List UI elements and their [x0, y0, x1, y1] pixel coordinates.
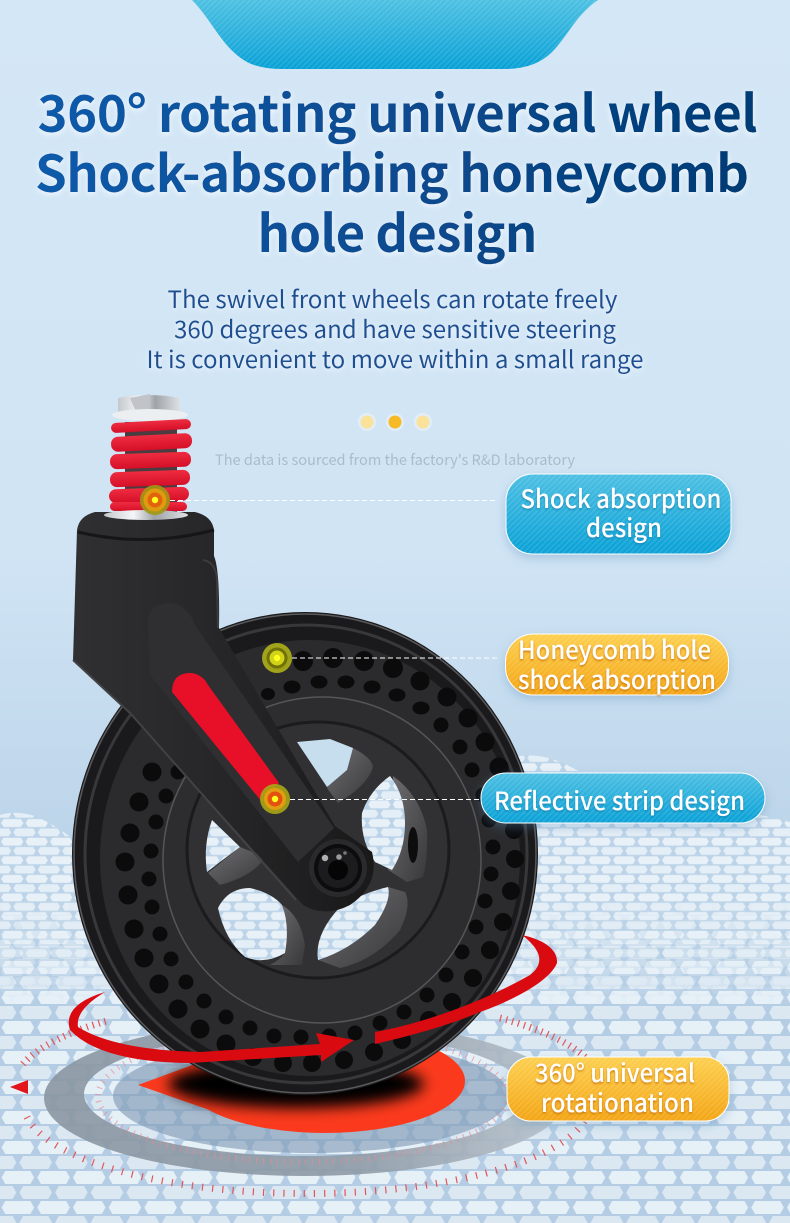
- leader lines: [170, 500, 498, 800]
- wheel: [72, 512, 538, 1095]
- callout: 360 universal rotationation: 360° universal: [535, 1054, 695, 1090]
- callout: shock absorption design: [506, 474, 731, 554]
- target marker: spring: [140, 485, 170, 515]
- callout: 360 universal rotationation: [507, 1054, 729, 1121]
- red coils: [109, 419, 192, 511]
- orange floor disc: [138, 1029, 465, 1133]
- spring and bolt: [104, 394, 192, 520]
- callout: 360 universal rotationation: rotationation: [541, 1084, 694, 1120]
- title: [35, 73, 758, 267]
- spoke walls: [208, 748, 427, 968]
- reflective strip: [172, 673, 279, 802]
- description text: [146, 280, 644, 375]
- red rotation arrow: [69, 935, 557, 1063]
- target marker: reflector: [260, 784, 290, 814]
- callout: honeycomb hole shock absorption: [506, 631, 728, 697]
- description text: It is convenient to move within a small range: [146, 340, 644, 375]
- callout: honeycomb hole shock absorption: Honeycomb hole: [518, 631, 711, 667]
- source note: The data is sourced from the factory's R&D laboratory: [215, 449, 575, 470]
- spring base washer: [104, 510, 188, 520]
- left arc with head: [69, 992, 354, 1063]
- hole band: [100, 640, 520, 1076]
- floor rings: [23, 1018, 590, 1193]
- callout: honeycomb hole shock absorption: shock absorption: [518, 661, 716, 697]
- axle bolt: [314, 844, 362, 892]
- target marker: honeycomb: [262, 643, 292, 673]
- top tab shape: [192, 0, 598, 69]
- right arc: [375, 935, 557, 1044]
- description text: 360 degrees and have sensitive steering: [174, 310, 616, 345]
- wheel shadow: [168, 1060, 424, 1108]
- honeycomb holes: [116, 648, 524, 1072]
- title: hole design: [258, 193, 538, 267]
- three dots: [358, 413, 432, 431]
- callout: shock absorption design: design: [586, 509, 662, 545]
- spoke windows: [297, 739, 353, 787]
- title: Shock-absorbing honeycomb: [35, 133, 749, 207]
- description text: The swivel front wheels can rotate freely: [168, 280, 618, 315]
- callout: reflective strip design: [481, 773, 765, 823]
- fork: [73, 512, 374, 912]
- title: 360° rotating universal wheel: [38, 73, 758, 147]
- nut: [118, 395, 180, 412]
- callout: shock absorption design: Shock absorption: [520, 480, 722, 516]
- callout: reflective strip design: Reflective strip design: [494, 782, 745, 818]
- mesh fabric ground: [0, 755, 790, 1223]
- red triangle marker: [10, 1080, 28, 1094]
- rim: [163, 697, 481, 1023]
- tire: [72, 612, 538, 1095]
